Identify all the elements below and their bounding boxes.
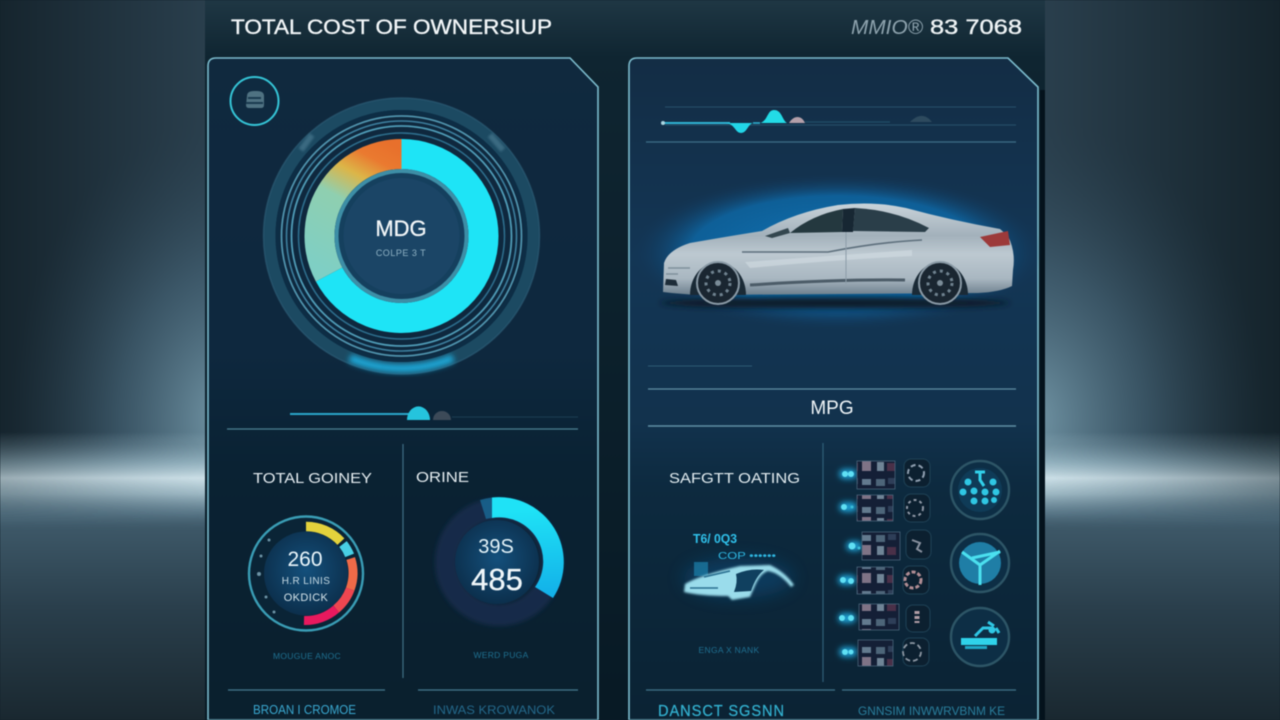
background: right side wall [1044,0,1280,719]
footer label: right: GNNSIM INWWRVBNM KE [858,704,1005,718]
caption: safety: ENGA X NANK [699,645,759,655]
gauge sublabel: COLPE 3 T [376,248,426,258]
gauge text: H.R LINIS [282,576,330,587]
header readout [851,16,1022,39]
row 2 [839,494,930,522]
footer label: right: INWAS KROWANOK [433,703,555,717]
donut value: 39S [478,536,514,558]
footer label: left: DANSCT SGSNN [658,703,785,720]
row 5 [838,604,930,632]
warm segment [319,154,402,274]
central dashboard board [205,0,1045,720]
slider indicator [290,406,578,420]
caption: left gauge: MOUGUE ANOC [273,651,341,661]
header readout: 83 7068 [930,16,1022,39]
heading: safety rating: SAFGTT OATING [669,470,800,487]
row 4 [838,566,929,594]
gauge text: OKDICK [284,592,329,604]
icon: vehicle badge [951,608,1009,666]
background: left side wall [0,0,206,719]
illustration: wireframe car with labels: COP •••••• [718,551,777,562]
chart: cyan score donut [446,497,564,615]
icon list: feature rows [838,459,931,666]
gauge value: 260 [287,548,323,571]
car glow [633,174,1043,330]
illustration: wireframe car with labels [683,531,794,600]
illustration: silver sedan [660,204,1014,309]
rear wheel [912,262,968,304]
header readout: MMIO® [851,17,923,39]
panel: fuel economy and ownership cost [208,58,598,720]
gauge label: MDG [375,216,427,241]
title: TOTAL COST OF OWNERSIUP [231,16,552,39]
row 3 [846,530,931,560]
donut value: 485 [471,562,523,597]
chart: multicolour cost gauge [249,516,363,630]
row 1 [839,459,930,489]
heading: second gauge: ORINE [416,469,469,486]
icon: cluster badge [951,461,1009,519]
section label: MPG: MPG [810,398,854,419]
chart: MPG donut gauge [264,98,540,374]
wave indicator [661,110,932,133]
cyan segment [329,154,483,318]
caption: right gauge: WERD PUGA [473,650,529,660]
panel: car overview and safety rating [629,58,1043,720]
front wheel [690,262,746,304]
illustration: wireframe car with labels: T6/ 0Q3 [693,531,737,546]
row 6 [839,638,929,666]
footer label: left: BROAN I CROMOE [253,702,356,717]
heading: total gauge: TOTAL GOINEY [253,470,372,487]
icon: car badge [230,77,278,125]
icon: steering wheel badge [951,534,1009,592]
